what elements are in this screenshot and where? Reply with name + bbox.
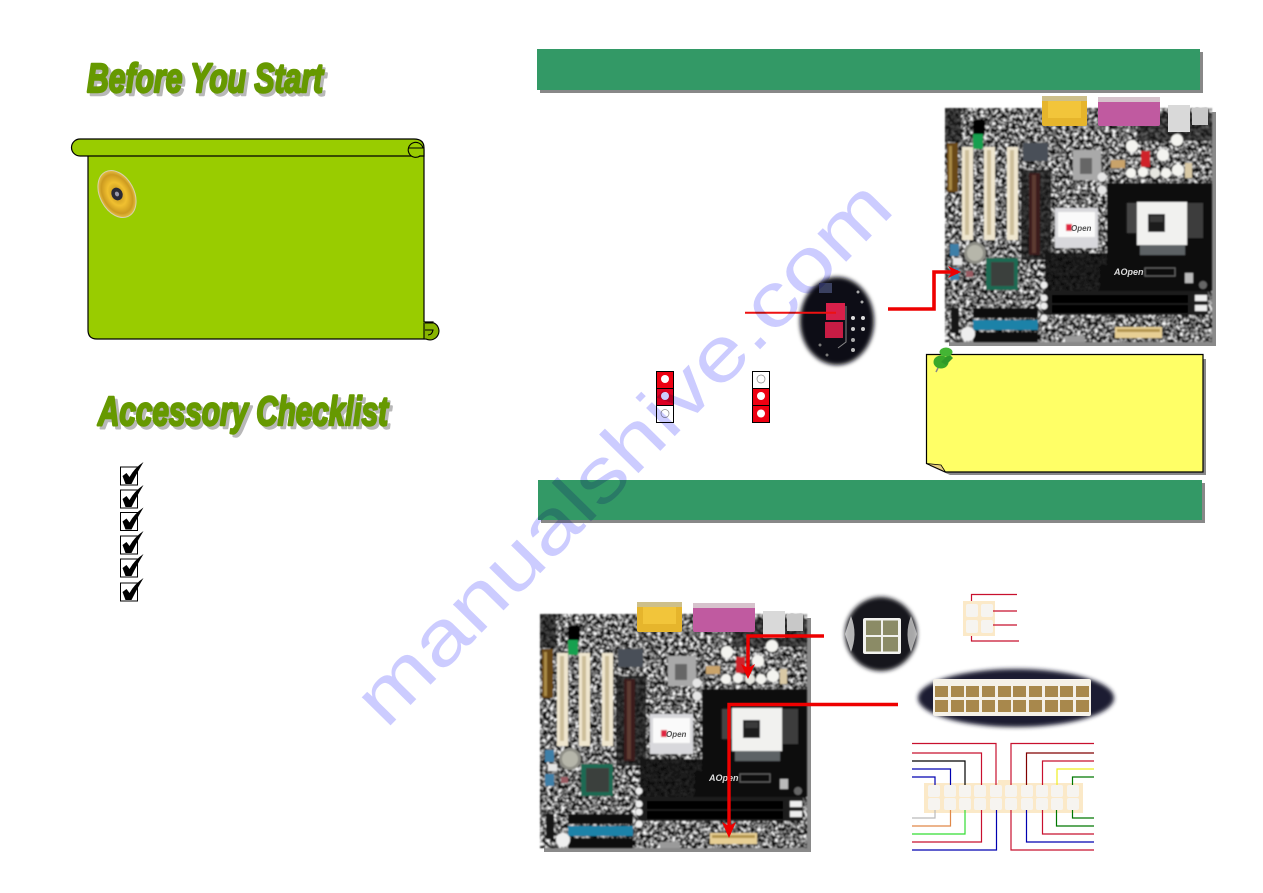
accessory checklist checkboxes bbox=[120, 462, 144, 601]
round zoom photo: jumper bbox=[800, 277, 874, 365]
title: Accessory Checklist: Accessory Checklist bbox=[97, 388, 390, 434]
motherboard photo: top bbox=[945, 96, 1216, 346]
round zoom photo: 4-pin connector bbox=[845, 597, 917, 671]
motherboard photo: bottom bbox=[540, 602, 811, 852]
elbow arrow to 4-pin connector bbox=[741, 636, 824, 679]
icon: bottom scroll curl bbox=[424, 323, 439, 340]
note panel: yellow sticky bbox=[926, 348, 1206, 475]
pin diagram: 4-pin bbox=[963, 594, 1019, 641]
round zoom photo: ATX connector bbox=[918, 669, 1114, 727]
heading bar: top section bbox=[537, 49, 1203, 93]
motherboard photo: top: Open bbox=[1071, 224, 1092, 233]
checkbox 1 bbox=[120, 462, 144, 485]
checkbox 2 bbox=[120, 485, 144, 508]
title: Before You Start: Before You Start bbox=[87, 55, 325, 101]
elbow arrow to ATX connector bbox=[722, 704, 898, 838]
icon: green push pin bbox=[934, 348, 953, 372]
icon: gold CD bbox=[90, 164, 144, 224]
motherboard photo: bottom: Open bbox=[666, 730, 687, 739]
checkbox 5 bbox=[120, 554, 144, 577]
checkbox 4 bbox=[120, 531, 144, 554]
pin diagram: 20-pin ATX bbox=[912, 744, 1094, 850]
icon: page fold bbox=[926, 464, 946, 472]
panel: scroll bbox=[72, 139, 439, 340]
checkbox 3 bbox=[120, 508, 144, 530]
elbow arrow to motherboard bbox=[888, 266, 961, 309]
checkbox 6 bbox=[120, 578, 144, 601]
icon: top scroll curl bbox=[408, 142, 423, 157]
motherboard photo: bottom: AOpen bbox=[708, 773, 739, 783]
jumper diagram: right bbox=[752, 372, 770, 422]
heading bar: bottom section bbox=[538, 480, 1205, 523]
pointer line to jumper bbox=[745, 312, 836, 314]
watermark: manualshive.com bbox=[337, 163, 908, 742]
motherboard photo: top: AOpen bbox=[1113, 267, 1144, 277]
jumper diagram: left bbox=[656, 372, 674, 422]
